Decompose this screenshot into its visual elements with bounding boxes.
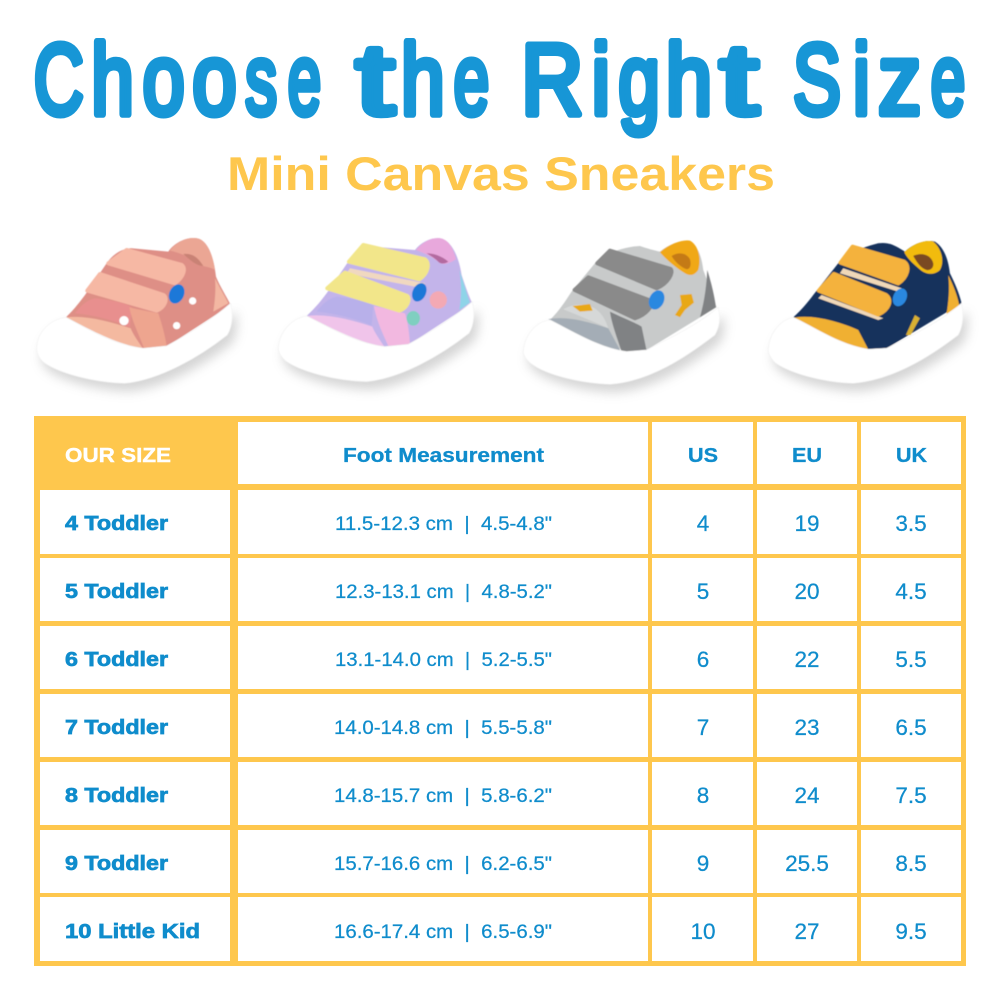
title: s (245, 24, 277, 136)
row: 10 Little Kid: 10 Little Kid (65, 921, 200, 943)
row: 7 Toddler: 14.0-14.8 cm | 5.5-5.8" (334, 717, 552, 739)
row: 4 Toddler: 19 (794, 511, 820, 536)
title: o (143, 24, 185, 136)
row: 6 Toddler (65, 647, 927, 672)
title: e (931, 24, 965, 136)
title: z (878, 24, 921, 136)
row: 7 Toddler (65, 715, 927, 740)
row: 5 Toddler (65, 579, 927, 604)
row: 10 Little Kid (65, 919, 927, 944)
row: 8 Toddler (65, 783, 927, 808)
title: e (288, 24, 321, 136)
row: 5 Toddler: 20 (794, 579, 820, 604)
row: 6 Toddler: 6 (697, 647, 709, 672)
row: 6 Toddler: 22 (794, 647, 820, 672)
row: 6 Toddler: 6 Toddler (65, 649, 168, 671)
table header row (65, 445, 928, 467)
row: 10 Little Kid: 27 (794, 919, 820, 944)
subtitle: Mini Canvas Sneakers (227, 147, 775, 200)
row: 4 Toddler: 11.5-12.3 cm | 4.5-4.8" (335, 513, 552, 535)
title: S (793, 24, 841, 136)
title: g (618, 24, 660, 136)
table header row: US (688, 445, 718, 467)
row: 9 Toddler: 9 (697, 851, 709, 876)
title: e (454, 24, 489, 136)
title: t (356, 24, 394, 136)
title: i (592, 24, 610, 136)
table header row: EU (792, 445, 822, 467)
row: 4 Toddler: 4 Toddler (65, 513, 168, 535)
title: h (666, 24, 712, 136)
row: 8 Toddler: 14.8-15.7 cm | 5.8-6.2" (334, 785, 552, 807)
row: 9 Toddler: 15.7-16.6 cm | 6.2-6.5" (334, 853, 552, 875)
row: 8 Toddler: 24 (794, 783, 820, 808)
title: h (91, 24, 134, 136)
row: 7 Toddler: 7 Toddler (65, 717, 168, 739)
row: 5 Toddler: 4.5 (895, 579, 927, 604)
row: 8 Toddler: 8 (697, 783, 709, 808)
row: 10 Little Kid: 10 (690, 919, 716, 944)
shoe: lilac sneaker (278, 238, 478, 390)
row: 5 Toddler: 12.3-13.1 cm | 4.8-5.2" (335, 581, 552, 603)
title: o (192, 24, 237, 136)
table header row: Foot Measurement (343, 445, 544, 467)
row: 6 Toddler: 5.5 (895, 647, 927, 672)
row: 7 Toddler: 23 (794, 715, 820, 740)
row: 4 Toddler: 3.5 (895, 511, 927, 536)
row: 9 Toddler: 9 Toddler (65, 853, 168, 875)
row: 5 Toddler: 5 (697, 579, 709, 604)
shoe: pink daisy sneaker (37, 238, 237, 391)
title: C (34, 24, 84, 136)
row: 9 Toddler: 8.5 (895, 851, 927, 876)
size table (34, 416, 966, 966)
row: 10 Little Kid: 16.6-17.4 cm | 6.5-6.9" (334, 921, 552, 943)
shoe: grey digger sneaker (523, 240, 724, 392)
row: 7 Toddler: 6.5 (895, 715, 927, 740)
title: i (853, 24, 870, 136)
table header row: UK (896, 445, 928, 467)
row: 6 Toddler: 13.1-14.0 cm | 5.2-5.5" (335, 649, 552, 671)
row: 8 Toddler: 8 Toddler (65, 785, 168, 807)
title: h (401, 24, 445, 136)
row: 4 Toddler: 4 (697, 511, 709, 536)
table header row: OUR SIZE (65, 445, 171, 467)
row: 9 Toddler (65, 851, 927, 876)
row: 9 Toddler: 25.5 (785, 851, 829, 876)
row: 4 Toddler (65, 511, 927, 536)
title: R (521, 24, 583, 136)
title: t (720, 24, 758, 136)
row: 5 Toddler: 5 Toddler (65, 581, 168, 603)
row: 8 Toddler: 7.5 (895, 783, 927, 808)
row: 10 Little Kid: 9.5 (895, 919, 927, 944)
row: 7 Toddler: 7 (697, 715, 709, 740)
shoe: navy yellow sneaker (768, 241, 968, 391)
